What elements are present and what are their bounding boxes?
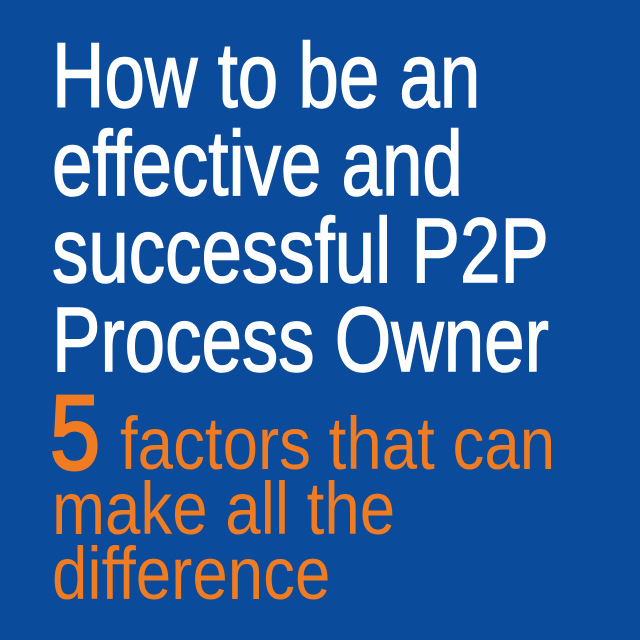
title line 2: effective and <box>52 113 463 215</box>
title line 4: Process Owner <box>52 289 549 391</box>
subtitle line 1: factors that can <box>120 402 555 485</box>
title line 1: How to be an <box>52 25 480 127</box>
subtitle <box>50 374 555 615</box>
title line 3: successful P2P <box>52 200 549 302</box>
subtitle line 3: difference <box>52 532 330 615</box>
title <box>52 25 549 391</box>
big number 5: 5 <box>50 374 100 492</box>
subtitle line 2: make all the <box>52 467 395 550</box>
